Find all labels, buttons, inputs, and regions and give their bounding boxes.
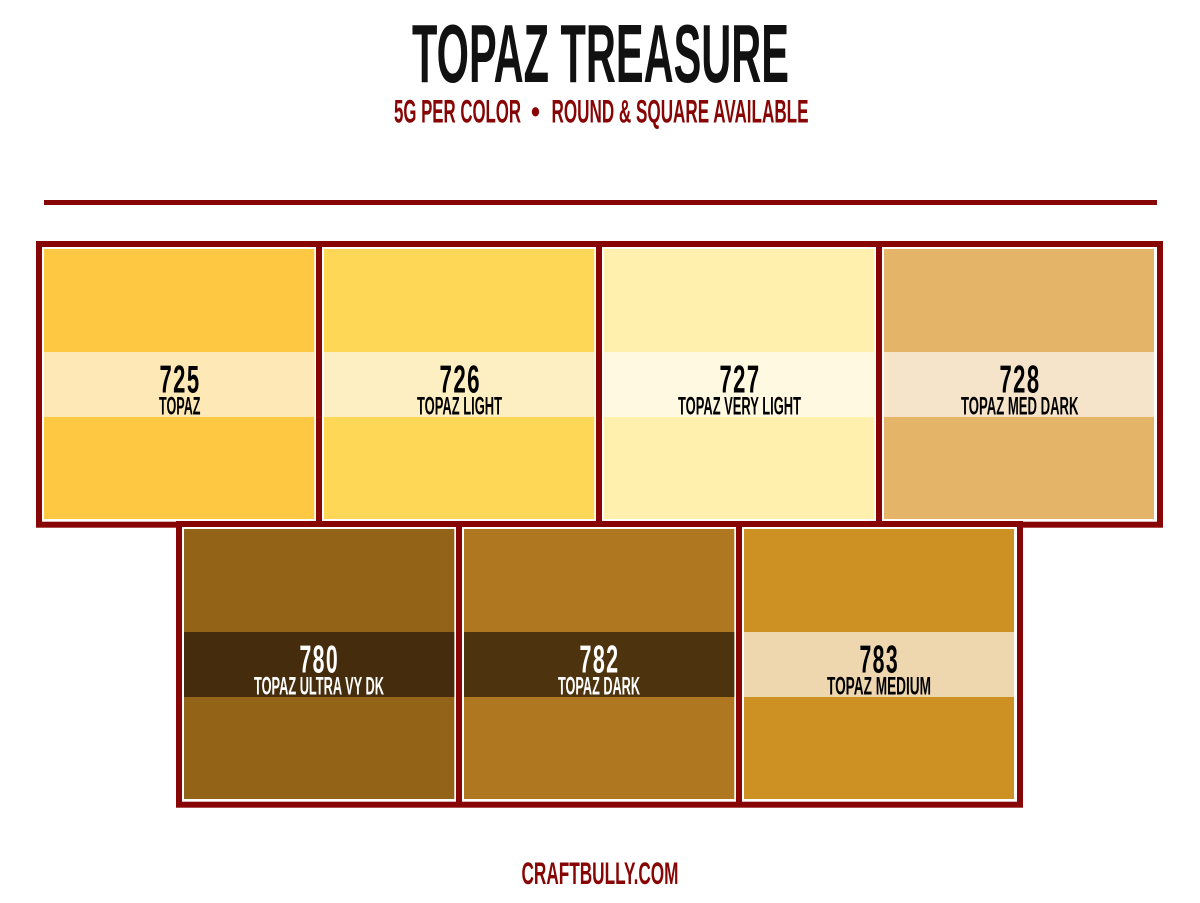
- swatch 727: 727: [720, 358, 760, 401]
- footer: CRAFTBULLY.COM: [522, 855, 678, 891]
- swatch 728: [882, 247, 1157, 522]
- swatch 725: [42, 247, 316, 522]
- subtitle: •: [531, 94, 540, 130]
- subtitle: [394, 94, 808, 130]
- swatch 782: 782: [580, 638, 620, 681]
- swatch 726: 726: [440, 358, 481, 401]
- panel: top row of swatches: [36, 241, 1163, 528]
- swatch 725: 725: [160, 358, 200, 401]
- divider rule: [44, 200, 1157, 205]
- swatch 783: TOPAZ MEDIUM: [827, 673, 931, 700]
- swatch 780: 780: [300, 638, 339, 681]
- swatch 780: TOPAZ ULTRA VY DK: [254, 673, 384, 700]
- subtitle: ROUND & SQUARE AVAILABLE: [552, 94, 808, 130]
- swatch 728: TOPAZ MED DARK: [961, 393, 1079, 420]
- swatch 725: TOPAZ: [159, 393, 200, 420]
- subtitle: 5G PER COLOR: [394, 94, 521, 130]
- swatch 727: TOPAZ VERY LIGHT: [678, 393, 801, 420]
- swatch 726: [322, 247, 596, 522]
- swatch 783: [742, 527, 1017, 802]
- swatch 728: 728: [1000, 358, 1040, 401]
- swatch 782: [462, 527, 736, 802]
- title: TOPAZ TREASURE: [412, 7, 789, 100]
- panel: bottom row of swatches: [176, 521, 1023, 808]
- swatch 726: TOPAZ LIGHT: [417, 393, 502, 420]
- swatch 780: [182, 527, 456, 802]
- swatch 782: TOPAZ DARK: [558, 673, 640, 700]
- swatch 727: [602, 247, 876, 522]
- swatch 783: 783: [860, 638, 899, 681]
